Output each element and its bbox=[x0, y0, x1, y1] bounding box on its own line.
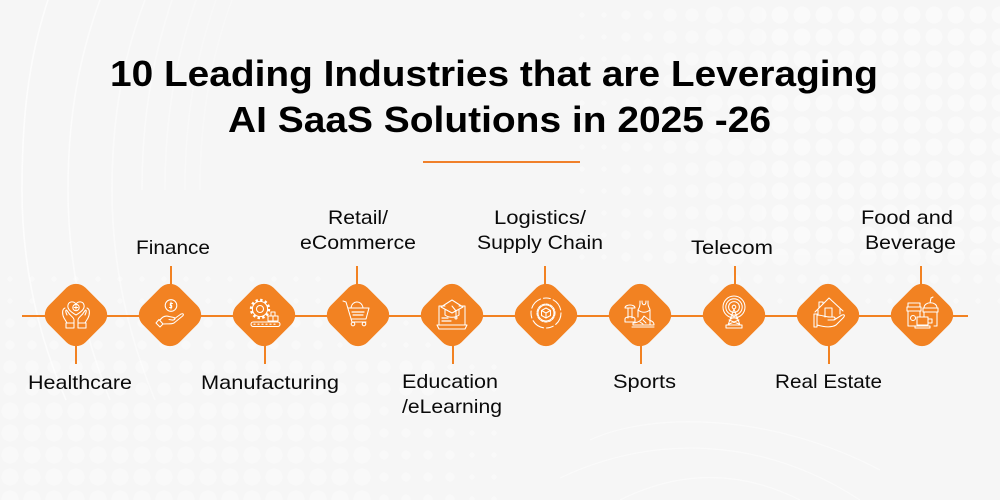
label: Logistics/ bbox=[494, 207, 587, 229]
title divider bbox=[423, 161, 580, 163]
diamond bbox=[415, 278, 489, 352]
diamond bbox=[697, 278, 771, 352]
diamond bbox=[791, 278, 865, 352]
label bbox=[300, 207, 416, 254]
timeline line bbox=[22, 266, 968, 364]
label bbox=[861, 207, 956, 254]
diamond bbox=[603, 278, 677, 352]
item: Real Estate bbox=[775, 278, 882, 393]
diamond bbox=[885, 278, 959, 352]
item: Food and Beverage bbox=[861, 207, 959, 352]
icon: gear and conveyor bbox=[251, 300, 280, 326]
icon: shopping cart bbox=[343, 301, 369, 326]
label: Manufacturing bbox=[201, 372, 339, 394]
icon: hand with coin bbox=[156, 300, 183, 327]
icon: cycle gear with cube bbox=[531, 298, 561, 328]
label: Healthcare bbox=[28, 372, 132, 394]
item: Logistics/Supply Chain bbox=[477, 207, 603, 352]
label: Education bbox=[402, 371, 498, 393]
label: Food and bbox=[861, 207, 953, 229]
icon: hands holding heart bbox=[63, 302, 89, 328]
icon: dumbbell, tank top and shoe bbox=[625, 301, 654, 327]
item: Finance bbox=[133, 237, 210, 352]
title: AI SaaS Solutions in 2025 -26 bbox=[228, 99, 771, 140]
item: Manufacturing bbox=[201, 278, 339, 394]
label: Real Estate bbox=[775, 371, 882, 393]
item: Retail/eCommerce bbox=[300, 207, 416, 352]
item: Healthcare bbox=[28, 278, 132, 394]
label: Retail/ bbox=[328, 207, 389, 229]
item: Telecom bbox=[691, 237, 773, 352]
label: Finance bbox=[136, 237, 210, 259]
diamond bbox=[227, 278, 301, 352]
label bbox=[477, 207, 603, 254]
item: Sports bbox=[603, 278, 677, 393]
diamond bbox=[133, 278, 207, 352]
diamond bbox=[321, 278, 395, 352]
title bbox=[110, 53, 878, 140]
icon: signal tower bbox=[723, 296, 745, 328]
label bbox=[402, 371, 502, 418]
label: Telecom bbox=[691, 237, 773, 259]
label: eCommerce bbox=[300, 232, 416, 254]
label: Supply Chain bbox=[477, 232, 603, 254]
title: 10 Leading Industries that are Leveraging bbox=[110, 53, 878, 94]
diamond bbox=[509, 278, 583, 352]
label: /eLearning bbox=[402, 396, 502, 418]
diamond bbox=[39, 278, 113, 352]
item: Education/eLearning bbox=[402, 278, 502, 418]
icon: house on hand bbox=[814, 298, 844, 327]
icon: cups and mug bbox=[907, 297, 938, 328]
label: Beverage bbox=[865, 232, 956, 254]
label: Sports bbox=[613, 371, 676, 393]
icon: laptop with graduation cap bbox=[437, 300, 467, 329]
